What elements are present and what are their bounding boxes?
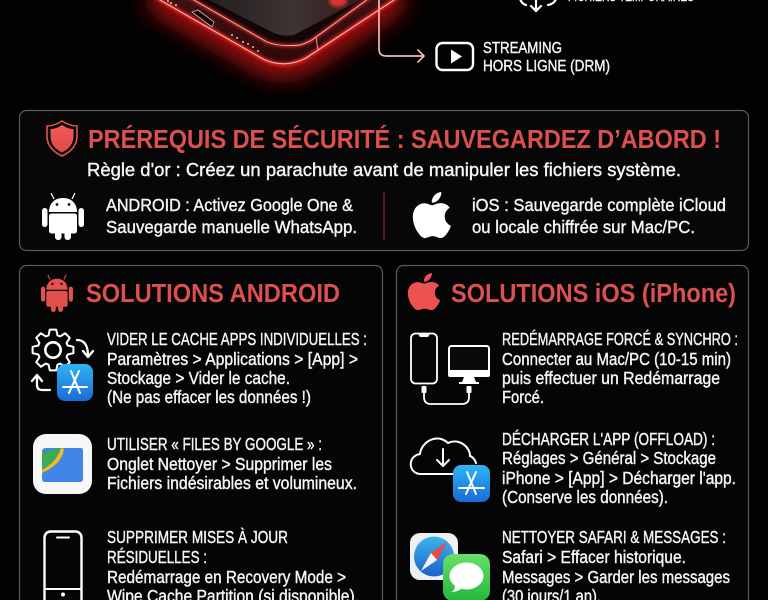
icon: gear with arrows and app store (32, 330, 93, 401)
label: streaming hors ligne (483, 40, 610, 75)
icon: apple white (413, 192, 451, 238)
text: vider le cache: Paramètres > Applications > [App] > (107, 349, 358, 369)
text: redémarrage forcé: Forcé. (502, 387, 544, 407)
panel: prérequis de sécurité (20, 110, 748, 250)
text: décharger l'app: DÉCHARGER L'APP (OFFLOAD) : (502, 429, 715, 449)
icon: cloud download with app store (411, 438, 490, 502)
text: supprimer mises à jour (107, 527, 359, 600)
text: android backup (106, 195, 357, 237)
icon: safari and messages (410, 533, 490, 600)
text: décharger l'app: (Conserve les données). (502, 487, 668, 507)
text: décharger l'app: Réglages > Général > Stockage (502, 448, 716, 468)
icon: apple red (408, 273, 440, 310)
text: nettoyer safari (502, 527, 730, 600)
text: supprimer mises à jour: SUPPRIMER MISES À JOUR (107, 527, 288, 547)
icon: shield (47, 121, 77, 156)
panel: solutions ios (396, 266, 748, 600)
illustration: glowing phone corner (153, 0, 400, 64)
text: redémarrage forcé (502, 329, 738, 407)
text: ios backup: ou locale chiffrée sur Mac/PC. (472, 217, 695, 237)
text: android backup: ANDROID : Activez Google One & (106, 195, 353, 215)
text: files by google: Fichiers indésirables et volumineux. (107, 473, 357, 493)
speaker dots (167, 0, 259, 52)
text: files by google: Onglet Nettoyer > Supprimer les (107, 454, 332, 474)
label: streaming hors ligne: STREAMING (483, 40, 562, 57)
text: vider le cache: VIDER LE CACHE APPS INDIVIDUELLES : (107, 329, 367, 349)
text: supprimer mises à jour: Redémarrage en Recovery Mode > (107, 567, 346, 587)
icon: download arrows (cropped) (520, 0, 556, 11)
text: vider le cache: Stockage > Vider le cache. (107, 368, 290, 388)
heading: solutions android: SOLUTIONS ANDROID (86, 280, 340, 308)
icon: smartphone outline (44, 532, 82, 600)
text: supprimer mises à jour: RÉSIDUELLES : (107, 547, 207, 567)
label: streaming hors ligne: HORS LIGNE (DRM) (483, 58, 610, 75)
text: ios backup: iOS : Sauvegarde complète iCloud (472, 195, 726, 215)
icon: charging port (192, 10, 214, 27)
text: nettoyer safari: Safari > Effacer historique. (502, 547, 686, 567)
text: règle d'or: Règle d'or : Créez un parachute avant de manipuler les fichiers système. (87, 159, 681, 180)
text: décharger l'app (502, 429, 736, 507)
text: files by google: UTILISER « FILES BY GOOGLE » : (107, 434, 322, 454)
arrow: phone to streaming (379, 0, 424, 62)
icon: android white (42, 193, 84, 240)
text: redémarrage forcé: puis effectuer un Redémarrage (502, 368, 720, 388)
text: décharger l'app: iPhone > [App] > Décharger l'app. (502, 468, 736, 488)
text: vider le cache: (Ne pas effacer les données !) (107, 387, 311, 407)
text: ios backup (472, 195, 726, 237)
panel: solutions android (20, 266, 382, 600)
text: vider le cache (107, 329, 367, 407)
text: android backup: Sauvegarde manuelle WhatsApp. (106, 217, 357, 237)
icon: files by google (33, 434, 92, 494)
icon: play button (436, 43, 473, 70)
icon: iphone connected to mac (411, 334, 490, 404)
heading: prérequis: PRÉREQUIS DE SÉCURITÉ : SAUVEGARDEZ D’ABORD ! (88, 125, 721, 154)
icon: android red (41, 275, 73, 312)
text: nettoyer safari: Messages > Garder les messages (502, 567, 730, 587)
heading: solutions ios: SOLUTIONS iOS (iPhone) (451, 280, 736, 308)
text: files by google (107, 434, 357, 493)
text: redémarrage forcé: Connecter au Mac/PC (10-15 min) (502, 349, 731, 369)
